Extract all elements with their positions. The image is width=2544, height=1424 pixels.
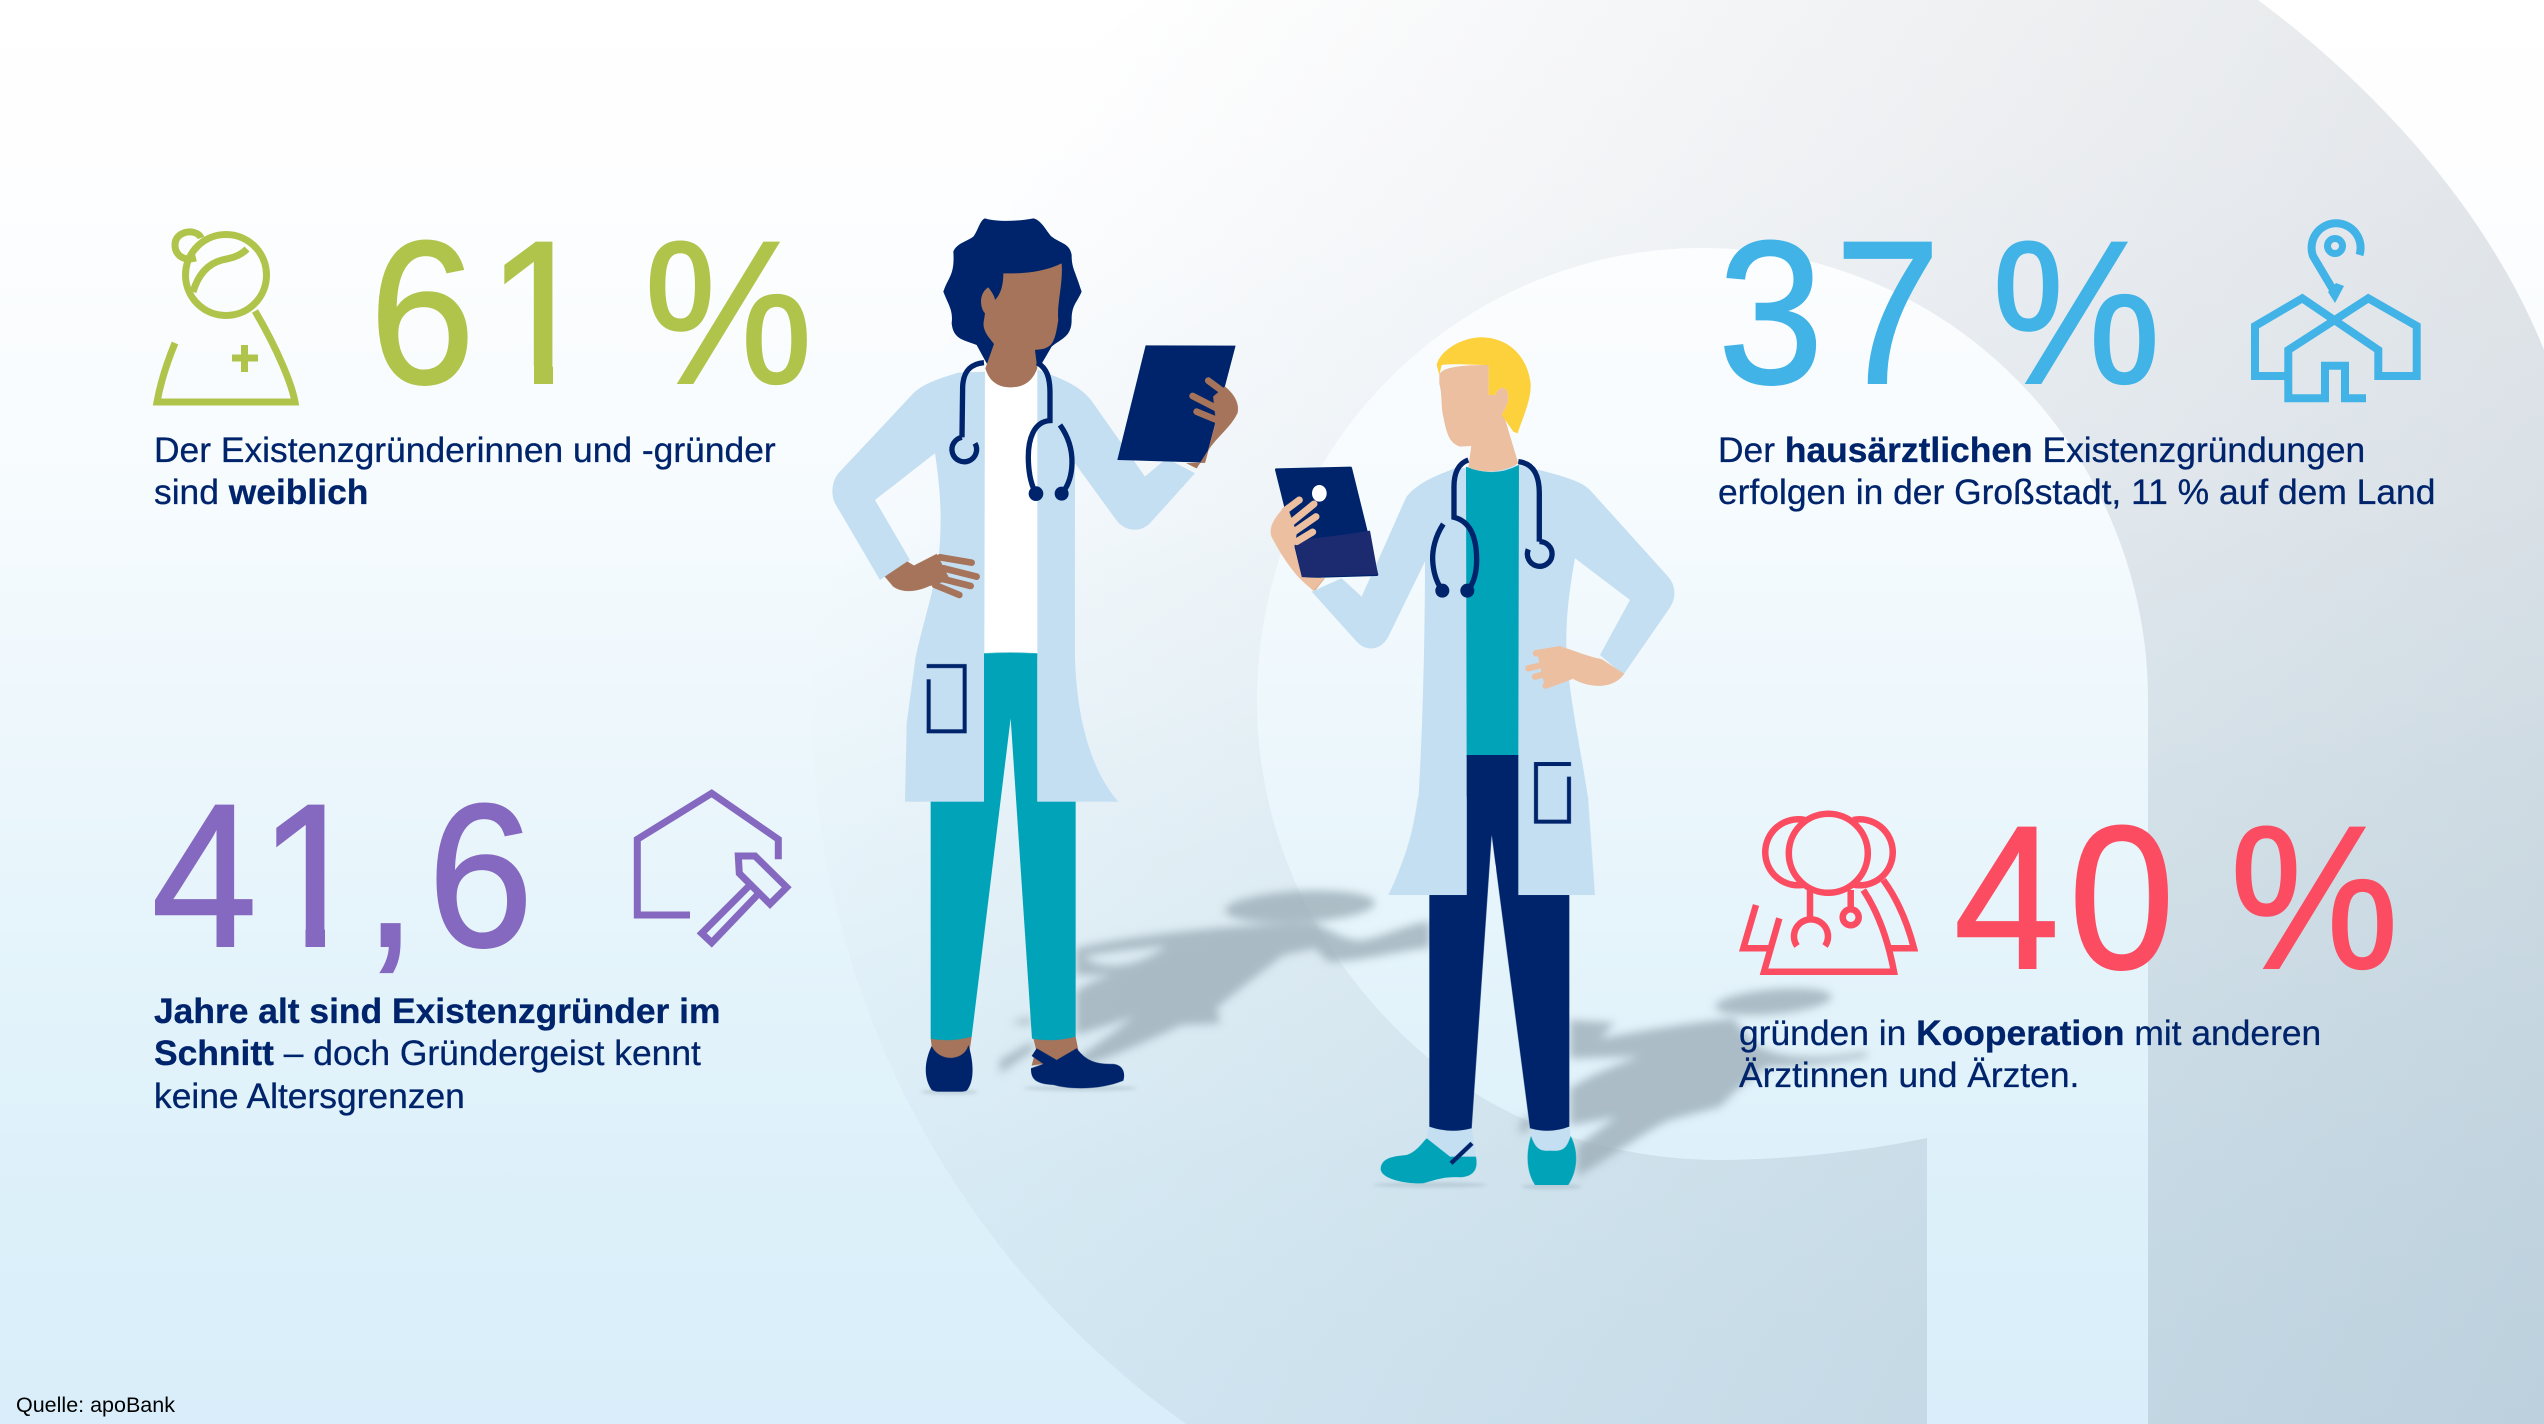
woman upper body: [832, 218, 1238, 660]
right hand: [1528, 647, 1624, 687]
description: Ärztinnen und Ärzten.: [1739, 1055, 2079, 1095]
trousers: [1429, 755, 1569, 1131]
T-shirt: [1466, 465, 1519, 757]
description: erfolgen in der Großstadt, 11 % auf dem Land: [1718, 472, 2435, 512]
coat hem: [1388, 797, 1595, 895]
icon: house with hammer: [637, 793, 787, 943]
stat: 61 percent: [152, 228, 807, 504]
coat torso and arms: [832, 370, 1195, 660]
description: [1739, 1013, 2321, 1095]
hair: [943, 218, 1082, 367]
shoes: [926, 1045, 1124, 1092]
upper hand: [1187, 381, 1238, 468]
socks: [1427, 1127, 1571, 1158]
number: 41,6: [152, 762, 533, 989]
coat torso and arms: [1312, 465, 1674, 800]
stethoscope: [952, 363, 1072, 492]
clipboard: [1117, 345, 1236, 463]
number: 37 %: [1718, 199, 2161, 426]
face and neck: [981, 263, 1062, 387]
stat: 41,6 years: [152, 762, 787, 1116]
ground shadow under shoes: [921, 1086, 1137, 1095]
pocket: [927, 666, 965, 731]
tablet reflection: [1294, 531, 1378, 577]
coat hem: [905, 657, 1118, 802]
icon: houses with location pin: [2255, 223, 2417, 398]
woman lower body: [905, 653, 1137, 1095]
left hand: [1271, 500, 1324, 591]
stat: 40 percent: [1739, 784, 2399, 1095]
description: [154, 991, 720, 1116]
shoes: [1381, 1136, 1576, 1185]
description: sind weiblich: [154, 472, 368, 512]
description: Jahre alt sind Existenzgründer im: [154, 991, 720, 1031]
lower hand: [885, 554, 977, 595]
wrist behind tablet: [1305, 577, 1325, 591]
description: gründen in Kooperation mit anderen: [1739, 1013, 2321, 1053]
ankles: [931, 1037, 1078, 1066]
number: 40 %: [1954, 784, 2399, 1011]
hair: [1437, 337, 1531, 433]
stat: 37 percent: [1718, 199, 2435, 512]
number: 61 %: [369, 199, 813, 426]
pocket: [1536, 764, 1571, 822]
neck: [1468, 413, 1518, 471]
description: keine Altersgrenzen: [154, 1076, 465, 1116]
face: [1439, 365, 1508, 447]
description: [1718, 430, 2435, 512]
description: Schnitt – doch Gründergeist kennt: [154, 1033, 701, 1073]
stethoscope: [1433, 460, 1552, 590]
trousers: [931, 653, 1076, 1040]
source note: Quelle: apoBank: [16, 1393, 175, 1417]
shoe strap: [1451, 1143, 1472, 1163]
figure: man doctor: [1271, 337, 1674, 1189]
icon: group of doctors: [1743, 814, 1914, 972]
shadow of the man: [1520, 984, 1867, 1177]
shadow of the woman: [1000, 887, 1430, 1073]
tablet: [1276, 468, 1377, 577]
background logo letter a: [811, 0, 2544, 1424]
description: [154, 430, 776, 512]
description: Der Existenzgründerinnen und -gründer: [154, 430, 776, 470]
undershirt: [984, 365, 1037, 657]
man lower body: [1373, 755, 1595, 1189]
ground shadow under shoes: [1373, 1182, 1582, 1189]
icon: female doctor: [157, 232, 295, 402]
figure: woman doctor: [832, 218, 1238, 1095]
description: Der hausärztlichen Existenzgründungen: [1718, 430, 2365, 470]
white dot: [1312, 485, 1327, 502]
man upper body: [1271, 337, 1674, 800]
